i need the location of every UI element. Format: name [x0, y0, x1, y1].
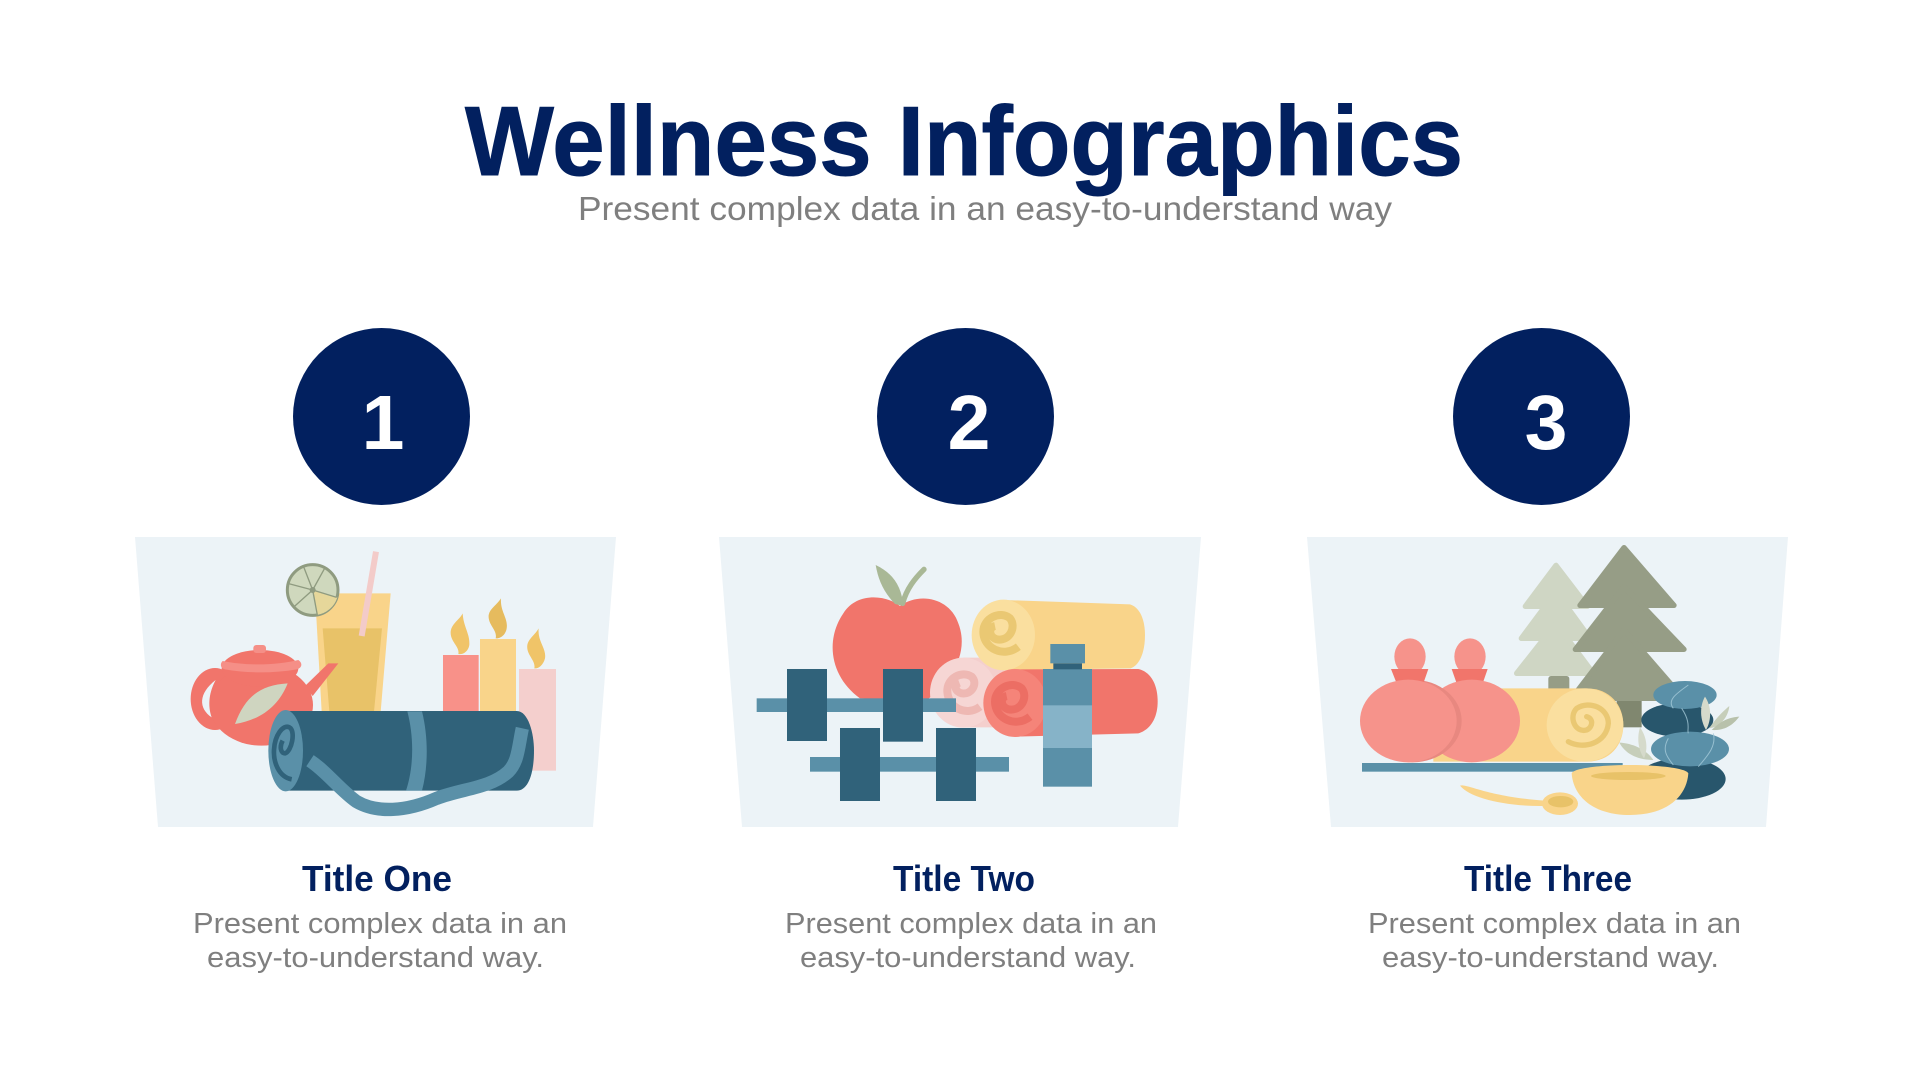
illustration: trees, herbal balls, towel, stones and bowl — [1360, 548, 1739, 815]
text block: column one description — [193, 908, 567, 974]
icon: stacked spa stones — [1619, 681, 1739, 800]
illustration: drink, teapot, candles and yoga mat — [191, 552, 556, 809]
panel: column one background — [135, 537, 616, 827]
number badge 1: 1 — [362, 380, 404, 466]
panel: column three background — [1307, 537, 1788, 827]
icon: wooden bowl — [1572, 765, 1688, 815]
icon: yellow rolled towel — [1433, 688, 1623, 762]
icon: teapot — [191, 645, 338, 746]
number badge 3: 3 — [1525, 380, 1567, 466]
heading: title three: Title Three — [1464, 858, 1632, 899]
title: Wellness Infographics — [465, 86, 1463, 196]
icon: rolled yoga mat — [268, 710, 534, 809]
icon: upper dumbbell — [757, 669, 956, 742]
number badge 3 — [1453, 328, 1630, 505]
icon: water bottle — [1043, 644, 1092, 787]
icon: apple — [833, 565, 962, 700]
number badge 1 — [293, 328, 470, 505]
text block: column one description: easy-to-understand way. — [207, 942, 544, 974]
icon: red rolled towel — [983, 669, 1158, 737]
icon: dark pine tree — [1572, 548, 1684, 727]
text block: column one description: Present complex data in an — [193, 908, 567, 940]
panel: column two background — [719, 537, 1201, 827]
text block: column three description: easy-to-understand way. — [1382, 942, 1719, 974]
text block: column three description: Present complex data in an — [1368, 908, 1741, 940]
text block: column two description — [785, 908, 1157, 974]
illustration: apple, dumbbells, towels and water bottle — [757, 565, 1158, 801]
icon: lime slice — [287, 565, 338, 615]
icon: yellow rolled towel — [972, 600, 1145, 670]
number badge 2 — [877, 328, 1054, 505]
text block: column two description: Present complex data in an — [785, 908, 1157, 940]
icon: glass of juice — [315, 552, 391, 712]
text block: column three description — [1368, 908, 1741, 974]
subtitle: Present complex data in an easy-to-understand way — [578, 190, 1393, 227]
text block: column two description: easy-to-understand way. — [800, 942, 1136, 974]
icon: pink rolled towel — [930, 658, 1010, 728]
icon: spoon — [1460, 785, 1578, 815]
heading: title one: Title One — [302, 858, 452, 899]
icon: candles — [443, 598, 556, 771]
icon: tray shelf — [1362, 763, 1623, 772]
icon: lower dumbbell — [810, 728, 1009, 801]
icon: light pine tree — [1517, 565, 1593, 690]
icon: herbal compress balls — [1360, 638, 1520, 762]
heading: title two: Title Two — [893, 858, 1035, 899]
number badge 2: 2 — [948, 380, 990, 466]
